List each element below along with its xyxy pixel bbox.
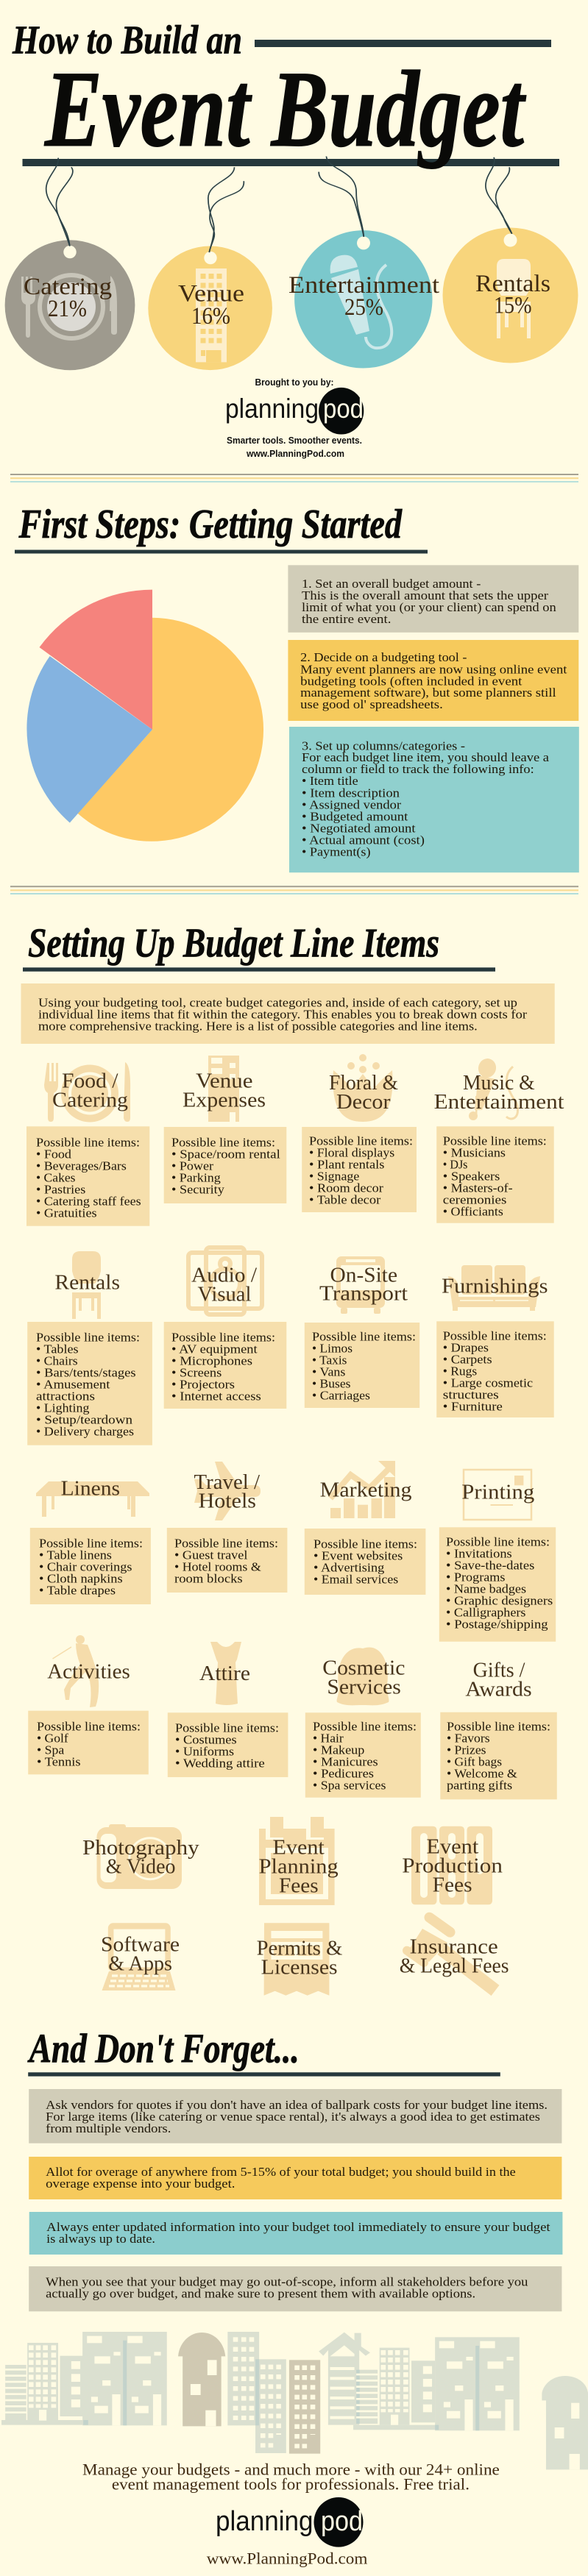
line items bbox=[168, 1712, 288, 1777]
line items: • Table linens bbox=[39, 1548, 112, 1562]
line items bbox=[436, 1321, 554, 1417]
category: permits and licenses bbox=[257, 1923, 343, 1996]
line items: • Golf bbox=[37, 1732, 68, 1746]
step 1 text: This is the overall amount that sets the upper bbox=[302, 588, 548, 602]
icon: hair bbox=[337, 1647, 389, 1705]
line items: • Uniforms bbox=[175, 1745, 234, 1759]
tag strings bbox=[46, 157, 512, 252]
title: Photography bbox=[82, 1836, 199, 1860]
line items: • Room decor bbox=[309, 1181, 383, 1195]
tip panel: vendor quotes: Ask vendors for quotes if you don't have an idea of ballpark costs for your budget line items. bbox=[46, 2098, 548, 2112]
tag: rentals bbox=[443, 228, 578, 363]
line items: Possible line items: bbox=[37, 1720, 141, 1734]
line items bbox=[305, 1712, 421, 1798]
label: Venue bbox=[178, 281, 244, 307]
category: travel and hotels bbox=[167, 1462, 287, 1593]
icon: plate and cutlery bbox=[44, 1062, 130, 1122]
category: photography and video bbox=[82, 1824, 199, 1889]
icon: gavel bbox=[407, 1918, 495, 1990]
category: activities bbox=[28, 1635, 149, 1774]
panel: step 1 bbox=[288, 565, 578, 633]
line items: • Rugs bbox=[443, 1365, 477, 1378]
step 1 text: limit of what you (or your client) can spend on bbox=[302, 600, 556, 614]
line items bbox=[440, 1712, 557, 1799]
line items: Possible line items: bbox=[175, 1721, 279, 1735]
line items bbox=[436, 1126, 554, 1223]
line items: • Save-the-dates bbox=[446, 1559, 534, 1573]
closing text: event management tools for professionals. Free trial. bbox=[112, 2474, 470, 2493]
title: Gifts / bbox=[473, 1658, 525, 1682]
line items: • Limos bbox=[312, 1341, 353, 1355]
line items: • Cakes bbox=[36, 1170, 75, 1184]
category: food and catering: Catering bbox=[52, 1088, 128, 1111]
category: permits and licenses: Licenses bbox=[261, 1955, 338, 1979]
line items: • Favors bbox=[447, 1732, 490, 1746]
category: event planning fees: Fees bbox=[279, 1874, 319, 1898]
line items: ceremonies bbox=[443, 1192, 506, 1206]
line items: • AV equipment bbox=[171, 1342, 258, 1356]
line items: • Drapes bbox=[443, 1341, 489, 1355]
panel: step 3 bbox=[289, 727, 579, 872]
category: travel and hotels: Hotels bbox=[199, 1489, 256, 1512]
icon: van bbox=[336, 1256, 385, 1314]
line items: • Bars/tents/stages bbox=[36, 1365, 136, 1379]
icon: plate and cutlery bbox=[21, 273, 117, 341]
title bbox=[12, 17, 526, 170]
category: insurance and legal fees: & Legal Fees bbox=[400, 1954, 509, 1978]
line items: structures bbox=[443, 1388, 499, 1402]
line items: • Calligraphers bbox=[446, 1606, 525, 1620]
line items: Possible line items: bbox=[447, 1720, 550, 1734]
tag: catering bbox=[5, 240, 135, 370]
tag: venue bbox=[148, 246, 272, 370]
logo: planningpod footer: planning bbox=[216, 2506, 314, 2537]
tip panel: keep updated bbox=[29, 2212, 562, 2255]
heading: and don't forget bbox=[27, 2026, 500, 2077]
icon: microphone and note bbox=[469, 1056, 518, 1120]
line items: • Gift bags bbox=[447, 1755, 502, 1769]
tip panel: overage bbox=[29, 2157, 562, 2199]
step 1 text bbox=[302, 577, 556, 626]
line items: • Vans bbox=[312, 1365, 345, 1378]
percent: 25% bbox=[344, 294, 383, 321]
icon: camera bbox=[97, 1824, 182, 1889]
category: music and entertainment: Entertainment bbox=[434, 1090, 564, 1114]
line items: • Advertising bbox=[314, 1560, 385, 1574]
tip panel: inform stakeholders bbox=[29, 2266, 562, 2311]
title: Cosmetic bbox=[322, 1657, 405, 1680]
category: software and apps: & Apps bbox=[108, 1952, 172, 1976]
line items: • Setup/teardown bbox=[36, 1412, 133, 1426]
icon: sofa bbox=[448, 1265, 540, 1311]
icon: growth chart bbox=[330, 1461, 395, 1518]
line items: • Space/room rental bbox=[171, 1147, 280, 1161]
line items: • Pedicures bbox=[313, 1767, 374, 1781]
category: food and catering bbox=[26, 1062, 149, 1226]
title: Printing bbox=[461, 1480, 534, 1504]
line items: • Floral displays bbox=[309, 1145, 394, 1159]
line items: • Makeup bbox=[313, 1743, 364, 1757]
step 3 text: • Actual amount (cost) bbox=[302, 833, 425, 847]
category: event planning fees bbox=[259, 1817, 339, 1905]
category: floral and decor bbox=[302, 1054, 417, 1212]
closing text: Manage your budgets - and much more - with our 24+ online bbox=[82, 2460, 500, 2478]
line items: • Signage bbox=[309, 1169, 359, 1183]
title: Music & bbox=[463, 1071, 535, 1095]
icon: building bbox=[196, 268, 227, 362]
slice: blue bbox=[26, 656, 152, 822]
title: Floral & bbox=[329, 1071, 398, 1095]
line items: • Welcome & bbox=[447, 1767, 517, 1781]
line items: • Power bbox=[171, 1159, 213, 1173]
line items: • Taxis bbox=[312, 1353, 347, 1367]
line items: • Carriages bbox=[312, 1388, 370, 1402]
line items: • Buses bbox=[312, 1376, 350, 1390]
category: cosmetic services bbox=[305, 1647, 421, 1798]
icon: laptop bbox=[102, 1923, 175, 1990]
line items: • Event websites bbox=[314, 1548, 403, 1562]
tagline: Smarter tools. Smoother events. bbox=[227, 435, 362, 446]
line items: • Hotel rooms & bbox=[174, 1559, 261, 1573]
category: event production fees bbox=[402, 1826, 503, 1904]
intro panel bbox=[21, 983, 555, 1044]
title: Activities bbox=[47, 1660, 130, 1684]
line items: • Manicures bbox=[313, 1755, 378, 1769]
line items: parting gifts bbox=[447, 1779, 512, 1793]
icon: calendar bbox=[259, 1817, 335, 1905]
intro text: more comprehensive tracking. Here is a list of possible categories and line items. bbox=[38, 1019, 478, 1033]
line items: Possible line items: bbox=[313, 1720, 417, 1734]
step 2 text: management software), but some planners still bbox=[300, 686, 556, 700]
title: Furnishings bbox=[442, 1274, 548, 1298]
step 3 text: • Budgeted amount bbox=[302, 809, 408, 823]
step 2 text: budgeting tools (often included in event bbox=[300, 674, 523, 688]
category: event planning fees: Planning bbox=[259, 1855, 339, 1879]
step 1 text: 1. Set an overall budget amount - bbox=[302, 577, 481, 591]
icon: film panels bbox=[411, 1826, 492, 1904]
line items: • Spa services bbox=[313, 1779, 386, 1793]
title: Rentals bbox=[54, 1271, 120, 1295]
line items: Possible line items: bbox=[309, 1134, 413, 1148]
line items: • Chairs bbox=[36, 1353, 78, 1367]
step 3 text: • Item title bbox=[302, 774, 358, 788]
footer url: www.PlanningPod.com bbox=[207, 2550, 367, 2568]
tip panel: inform stakeholders: actually go over budget, and make sure to present them with available options. bbox=[46, 2287, 475, 2301]
category: audio visual: Visual bbox=[197, 1282, 251, 1306]
icon: chair bbox=[72, 1251, 101, 1319]
line items: • Spa bbox=[37, 1743, 65, 1757]
category: audio visual bbox=[164, 1248, 286, 1409]
line items bbox=[164, 1127, 286, 1203]
logo: planningpod: pod bbox=[323, 394, 364, 424]
step 2 text: use good ol' spreadsheets. bbox=[300, 697, 443, 711]
line items: • Carpets bbox=[443, 1353, 492, 1367]
line items: • Screens bbox=[171, 1365, 222, 1379]
tag disc bbox=[148, 246, 272, 370]
line items bbox=[27, 1322, 152, 1445]
line items: • Prizes bbox=[447, 1743, 486, 1757]
line items: • Hair bbox=[313, 1732, 344, 1746]
step 3 text: 3. Set up columns/categories - bbox=[302, 739, 465, 752]
line items: • Email services bbox=[314, 1572, 398, 1586]
step 3 text: For each budget line item, you should leave a bbox=[302, 750, 549, 764]
title: Linens bbox=[61, 1477, 120, 1501]
line items: • Pastries bbox=[36, 1182, 85, 1196]
line items bbox=[302, 1127, 417, 1212]
line items bbox=[164, 1322, 286, 1409]
sponsor block bbox=[225, 377, 364, 459]
line items: • Guest travel bbox=[174, 1548, 248, 1562]
logo: planningpod: planning bbox=[225, 394, 319, 424]
line items: Possible line items: bbox=[36, 1135, 140, 1149]
line items: • Internet access bbox=[171, 1389, 261, 1403]
step 2 text: 2. Decide on a budgeting tool - bbox=[300, 650, 467, 664]
category: printing bbox=[439, 1470, 556, 1642]
icon: microphone bbox=[330, 255, 392, 348]
hole bbox=[63, 246, 77, 258]
title: Permits & bbox=[257, 1936, 343, 1960]
hole bbox=[357, 236, 370, 249]
url: www.PlanningPod.com bbox=[246, 448, 344, 459]
icon: table bbox=[36, 1481, 149, 1517]
category: photography and video: & Video bbox=[106, 1855, 175, 1879]
label: Entertainment bbox=[288, 272, 439, 299]
title: Audio / bbox=[191, 1264, 258, 1287]
line items: Possible line items: bbox=[312, 1329, 416, 1343]
category: insurance and legal fees bbox=[400, 1918, 509, 1990]
step 1 text: the entire event. bbox=[302, 612, 392, 626]
line items: • Wedding attire bbox=[175, 1757, 265, 1771]
line items: • Furniture bbox=[443, 1400, 503, 1414]
line items: • Parking bbox=[171, 1170, 221, 1184]
line items: • Invitations bbox=[446, 1547, 512, 1561]
category: floral and decor: Decor bbox=[336, 1090, 391, 1114]
category: furnishings bbox=[436, 1265, 554, 1417]
line items bbox=[26, 1126, 149, 1226]
title: Travel / bbox=[194, 1470, 261, 1494]
tip panel: overage: overage expense into your budget. bbox=[46, 2177, 235, 2191]
line items bbox=[305, 1323, 419, 1408]
tag: entertainment bbox=[288, 230, 439, 368]
tag disc bbox=[5, 240, 135, 370]
line items bbox=[30, 1528, 151, 1604]
icon: speaker bbox=[188, 1248, 262, 1314]
line items: Possible line items: bbox=[39, 1536, 143, 1550]
line items bbox=[305, 1529, 425, 1595]
title: Event bbox=[272, 1836, 325, 1860]
category: software and apps bbox=[101, 1923, 180, 1990]
line items: • Microphones bbox=[171, 1353, 252, 1367]
step 2 text: Many event planners are now using online event bbox=[300, 662, 567, 676]
title: Insurance bbox=[409, 1935, 498, 1959]
step 3 text: • Negotiated amount bbox=[302, 821, 416, 836]
tip panel: vendor quotes bbox=[29, 2089, 562, 2143]
heading: and don't forget: And Don't Forget... bbox=[27, 2026, 300, 2071]
step 3 text bbox=[302, 739, 549, 858]
brought to you by: Brought to you by: bbox=[255, 377, 334, 388]
heading: setting up budget line items: Setting Up Budget Line Items bbox=[28, 921, 439, 967]
panel: step 2 bbox=[288, 640, 578, 721]
intro text: Using your budgeting tool, create budget categories and, inside of each category, set up bbox=[38, 995, 517, 1009]
line items: • Table decor bbox=[309, 1192, 381, 1206]
category: venue expenses bbox=[164, 1056, 286, 1203]
step 3 text: • Payment(s) bbox=[302, 844, 371, 858]
title: Software bbox=[101, 1933, 180, 1957]
line items: • Security bbox=[171, 1182, 224, 1196]
icon: dress bbox=[210, 1642, 241, 1705]
line items: • Plant rentals bbox=[309, 1157, 384, 1171]
icon: building bbox=[208, 1056, 239, 1122]
line items bbox=[439, 1527, 556, 1642]
line items: • Officiants bbox=[443, 1204, 503, 1218]
tip panel: inform stakeholders: When you see that your budget may go out-of-scope, inform all stakeholders before you bbox=[46, 2275, 528, 2289]
line items: • Large cosmetic bbox=[443, 1376, 534, 1390]
icon: tulip bbox=[333, 1054, 393, 1122]
category: venue expenses: Expenses bbox=[183, 1088, 266, 1111]
line items: • Beverages/Bars bbox=[36, 1159, 127, 1173]
line items: Possible line items: bbox=[443, 1134, 547, 1148]
line items: Possible line items: bbox=[174, 1536, 278, 1550]
category: gifts and awards bbox=[440, 1658, 557, 1799]
logo: planningpod footer bbox=[216, 2497, 364, 2547]
hole bbox=[503, 234, 517, 247]
percent: 16% bbox=[191, 303, 230, 330]
line items: • Lighting bbox=[36, 1401, 90, 1415]
tip panel: keep updated: Always enter updated information into your budget tool immediately to ensure your budget bbox=[46, 2220, 550, 2234]
line items: Possible line items: bbox=[314, 1537, 417, 1551]
title: On-Site bbox=[330, 1263, 397, 1287]
category: attire bbox=[168, 1642, 288, 1777]
line items: • DJs bbox=[443, 1157, 467, 1171]
line items: room blocks bbox=[174, 1571, 243, 1585]
line items: • Cloth napkins bbox=[39, 1571, 123, 1585]
step 3 text: • Item description bbox=[302, 786, 400, 800]
category: gifts and awards: Awards bbox=[465, 1677, 532, 1701]
line items bbox=[167, 1528, 287, 1593]
step 2 text bbox=[300, 650, 567, 711]
title line one: How to Build an bbox=[12, 17, 242, 62]
line items: • Catering staff fees bbox=[36, 1194, 141, 1208]
line items: Possible line items: bbox=[443, 1329, 547, 1343]
heading: first steps: First Steps: Getting Started bbox=[18, 502, 403, 547]
percent: 15% bbox=[494, 293, 531, 319]
line items: • Graphic designers bbox=[446, 1594, 553, 1608]
title: Venue bbox=[196, 1069, 253, 1092]
step 3 text: • Assigned vendor bbox=[302, 797, 401, 811]
label: Catering bbox=[24, 274, 112, 300]
tip panel: overage: Allot for overage of anywhere from 5-15% of your total budget; you should build in the bbox=[46, 2165, 516, 2179]
closing text bbox=[82, 2460, 500, 2493]
tip panel: vendor quotes: from multiple vendors. bbox=[46, 2121, 171, 2135]
line items: attractions bbox=[36, 1389, 95, 1403]
label: Rentals bbox=[475, 271, 550, 297]
line items: • Delivery charges bbox=[36, 1424, 134, 1438]
intro text bbox=[38, 995, 527, 1033]
line items: • Gratuities bbox=[36, 1206, 97, 1220]
line items: • Table drapes bbox=[39, 1583, 116, 1597]
line items bbox=[28, 1711, 149, 1774]
line items: • Masters-of- bbox=[443, 1181, 513, 1195]
icon: golfer bbox=[53, 1635, 99, 1707]
line items: • Food bbox=[36, 1147, 71, 1161]
line items: • Amusement bbox=[36, 1377, 110, 1391]
line items: Possible line items: bbox=[171, 1330, 275, 1344]
hole bbox=[204, 252, 217, 264]
line items: • Tables bbox=[36, 1342, 79, 1356]
line items: Possible line items: bbox=[171, 1135, 275, 1149]
line items: • Name badges bbox=[446, 1582, 526, 1596]
category: rentals bbox=[27, 1251, 152, 1445]
category: marketing bbox=[305, 1461, 425, 1595]
tag disc bbox=[443, 228, 578, 363]
slice: red bbox=[40, 590, 152, 730]
line items: • Chair coverings bbox=[39, 1559, 132, 1573]
icon: card bbox=[464, 1470, 531, 1520]
line items: • Postage/shipping bbox=[446, 1618, 548, 1632]
line items: • Costumes bbox=[175, 1733, 237, 1747]
icon: receipt bbox=[264, 1923, 329, 1996]
logo: planningpod footer: pod bbox=[321, 2506, 363, 2537]
title: Marketing bbox=[320, 1478, 412, 1501]
line items: • Programs bbox=[446, 1570, 505, 1584]
title: Event bbox=[426, 1835, 478, 1859]
line items: Possible line items: bbox=[36, 1330, 140, 1344]
line items: • Projectors bbox=[171, 1377, 235, 1391]
category: linens bbox=[30, 1477, 151, 1604]
logo: planningpod bbox=[225, 388, 364, 434]
line items: • Speakers bbox=[443, 1169, 500, 1183]
icon: airplane bbox=[194, 1462, 261, 1520]
pie chart bbox=[26, 590, 263, 842]
percent: 21% bbox=[48, 296, 87, 322]
step 3 text: column or field to track the following info: bbox=[302, 762, 534, 776]
intro text: individual line items that fit within the category. This enables you to break down costs for bbox=[38, 1007, 527, 1021]
title: Attire bbox=[199, 1662, 250, 1685]
category: on-site transport bbox=[305, 1256, 419, 1408]
skyline illustration bbox=[1, 2332, 588, 2469]
line items: Possible line items: bbox=[446, 1535, 550, 1549]
tag disc bbox=[294, 230, 433, 368]
line items: • Musicians bbox=[443, 1145, 506, 1159]
tip panel: vendor quotes: For large items (like catering or venue space rental), it's always a good idea to get estimates bbox=[46, 2110, 540, 2124]
category: cosmetic services: Services bbox=[327, 1676, 401, 1699]
icon: chair bbox=[497, 259, 531, 338]
title: Food / bbox=[62, 1069, 118, 1092]
category: on-site transport: Transport bbox=[319, 1281, 408, 1305]
tip panel: keep updated: is always up to date. bbox=[46, 2232, 155, 2246]
category: event production fees: Fees bbox=[433, 1873, 472, 1896]
category: music and entertainment bbox=[434, 1056, 564, 1223]
slice: yellow bbox=[78, 618, 263, 842]
line items: • Tennis bbox=[37, 1755, 81, 1769]
header rule bars bbox=[22, 40, 559, 166]
category: event production fees: Production bbox=[402, 1854, 503, 1877]
